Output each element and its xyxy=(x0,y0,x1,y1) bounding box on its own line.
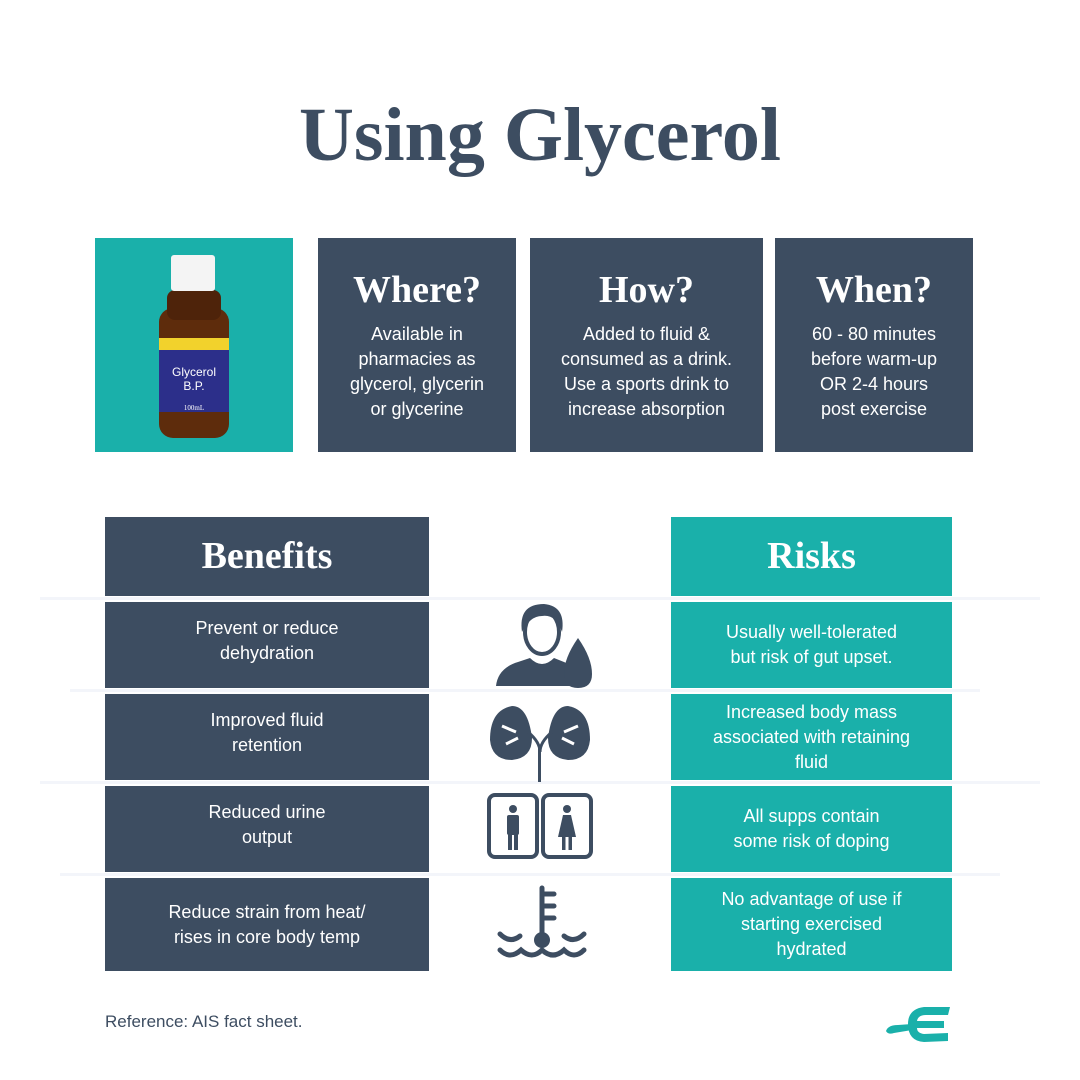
panel: when: OR 2-4 hours xyxy=(820,374,928,394)
risk 4: No advantage of use if xyxy=(721,889,902,909)
benefit 1: Prevent or reduce xyxy=(195,618,339,638)
risk 2: associated with retaining xyxy=(713,726,910,746)
benefit 3: Reduced urine xyxy=(208,802,326,822)
title: Using Glycerol xyxy=(299,93,781,177)
panel: when: 60 - 80 minutes xyxy=(812,324,936,344)
panel: when: before warm-up xyxy=(811,349,937,369)
risk 3: All supps contain xyxy=(743,806,880,826)
panel: where: glycerol, glycerin xyxy=(350,374,484,394)
risk 1 xyxy=(671,602,952,688)
icon: restroom xyxy=(487,793,593,859)
reference text: Reference: AIS fact sheet. xyxy=(105,1012,303,1031)
panel: when xyxy=(775,238,973,452)
panel: how: consumed as a drink. xyxy=(561,349,732,369)
risk 1: Usually well-tolerated xyxy=(726,622,897,642)
benefit 3: output xyxy=(242,827,292,847)
risk 1: but risk of gut upset. xyxy=(730,647,893,667)
icon: person with drop xyxy=(496,604,592,688)
risk 4: hydrated xyxy=(776,939,847,959)
benefit 2: Improved fluid xyxy=(210,710,324,730)
panel: how: Added to fluid & xyxy=(583,324,710,344)
panel: where: Where? xyxy=(353,269,481,311)
benefit 1: dehydration xyxy=(220,643,314,663)
benefit 2 xyxy=(105,694,429,780)
risk 2 xyxy=(671,694,952,780)
panel: where: or glycerine xyxy=(370,399,464,419)
heading: risks xyxy=(671,517,952,596)
panel: where: Available in xyxy=(371,324,463,344)
benefit 1 xyxy=(105,602,429,688)
risk 3: some risk of doping xyxy=(733,831,890,851)
panel: product image: Glycerol xyxy=(172,365,216,379)
risk 3 xyxy=(671,786,952,872)
risk 2: fluid xyxy=(795,752,828,772)
benefit 4: rises in core body temp xyxy=(174,926,360,946)
icon: temperature water xyxy=(498,886,586,958)
panel: where xyxy=(318,238,516,452)
panel: how: increase absorption xyxy=(568,399,725,419)
benefit 3 xyxy=(105,786,429,872)
panel: when: post exercise xyxy=(821,399,927,419)
panel: when: When? xyxy=(816,269,932,311)
panel: how xyxy=(530,238,763,452)
panel: product image: 100mL xyxy=(184,404,204,412)
heading: benefits xyxy=(105,517,429,596)
heading: benefits: Benefits xyxy=(202,535,332,577)
panel: product image: B.P. xyxy=(183,379,205,393)
benefit 4: Reduce strain from heat/ xyxy=(168,902,366,922)
logo xyxy=(886,1007,950,1042)
panel: where: pharmacies as xyxy=(358,349,476,369)
risk 2: Increased body mass xyxy=(726,702,897,722)
benefit 4 xyxy=(105,878,429,971)
icon: kidneys xyxy=(490,706,590,782)
panel: how: Use a sports drink to xyxy=(564,374,729,394)
panel: how: How? xyxy=(599,269,694,311)
risk 4: starting exercised xyxy=(741,914,882,934)
risk 4 xyxy=(671,878,952,971)
heading: risks: Risks xyxy=(767,535,856,577)
benefit 2: retention xyxy=(232,735,302,755)
panel: product image xyxy=(95,238,293,452)
